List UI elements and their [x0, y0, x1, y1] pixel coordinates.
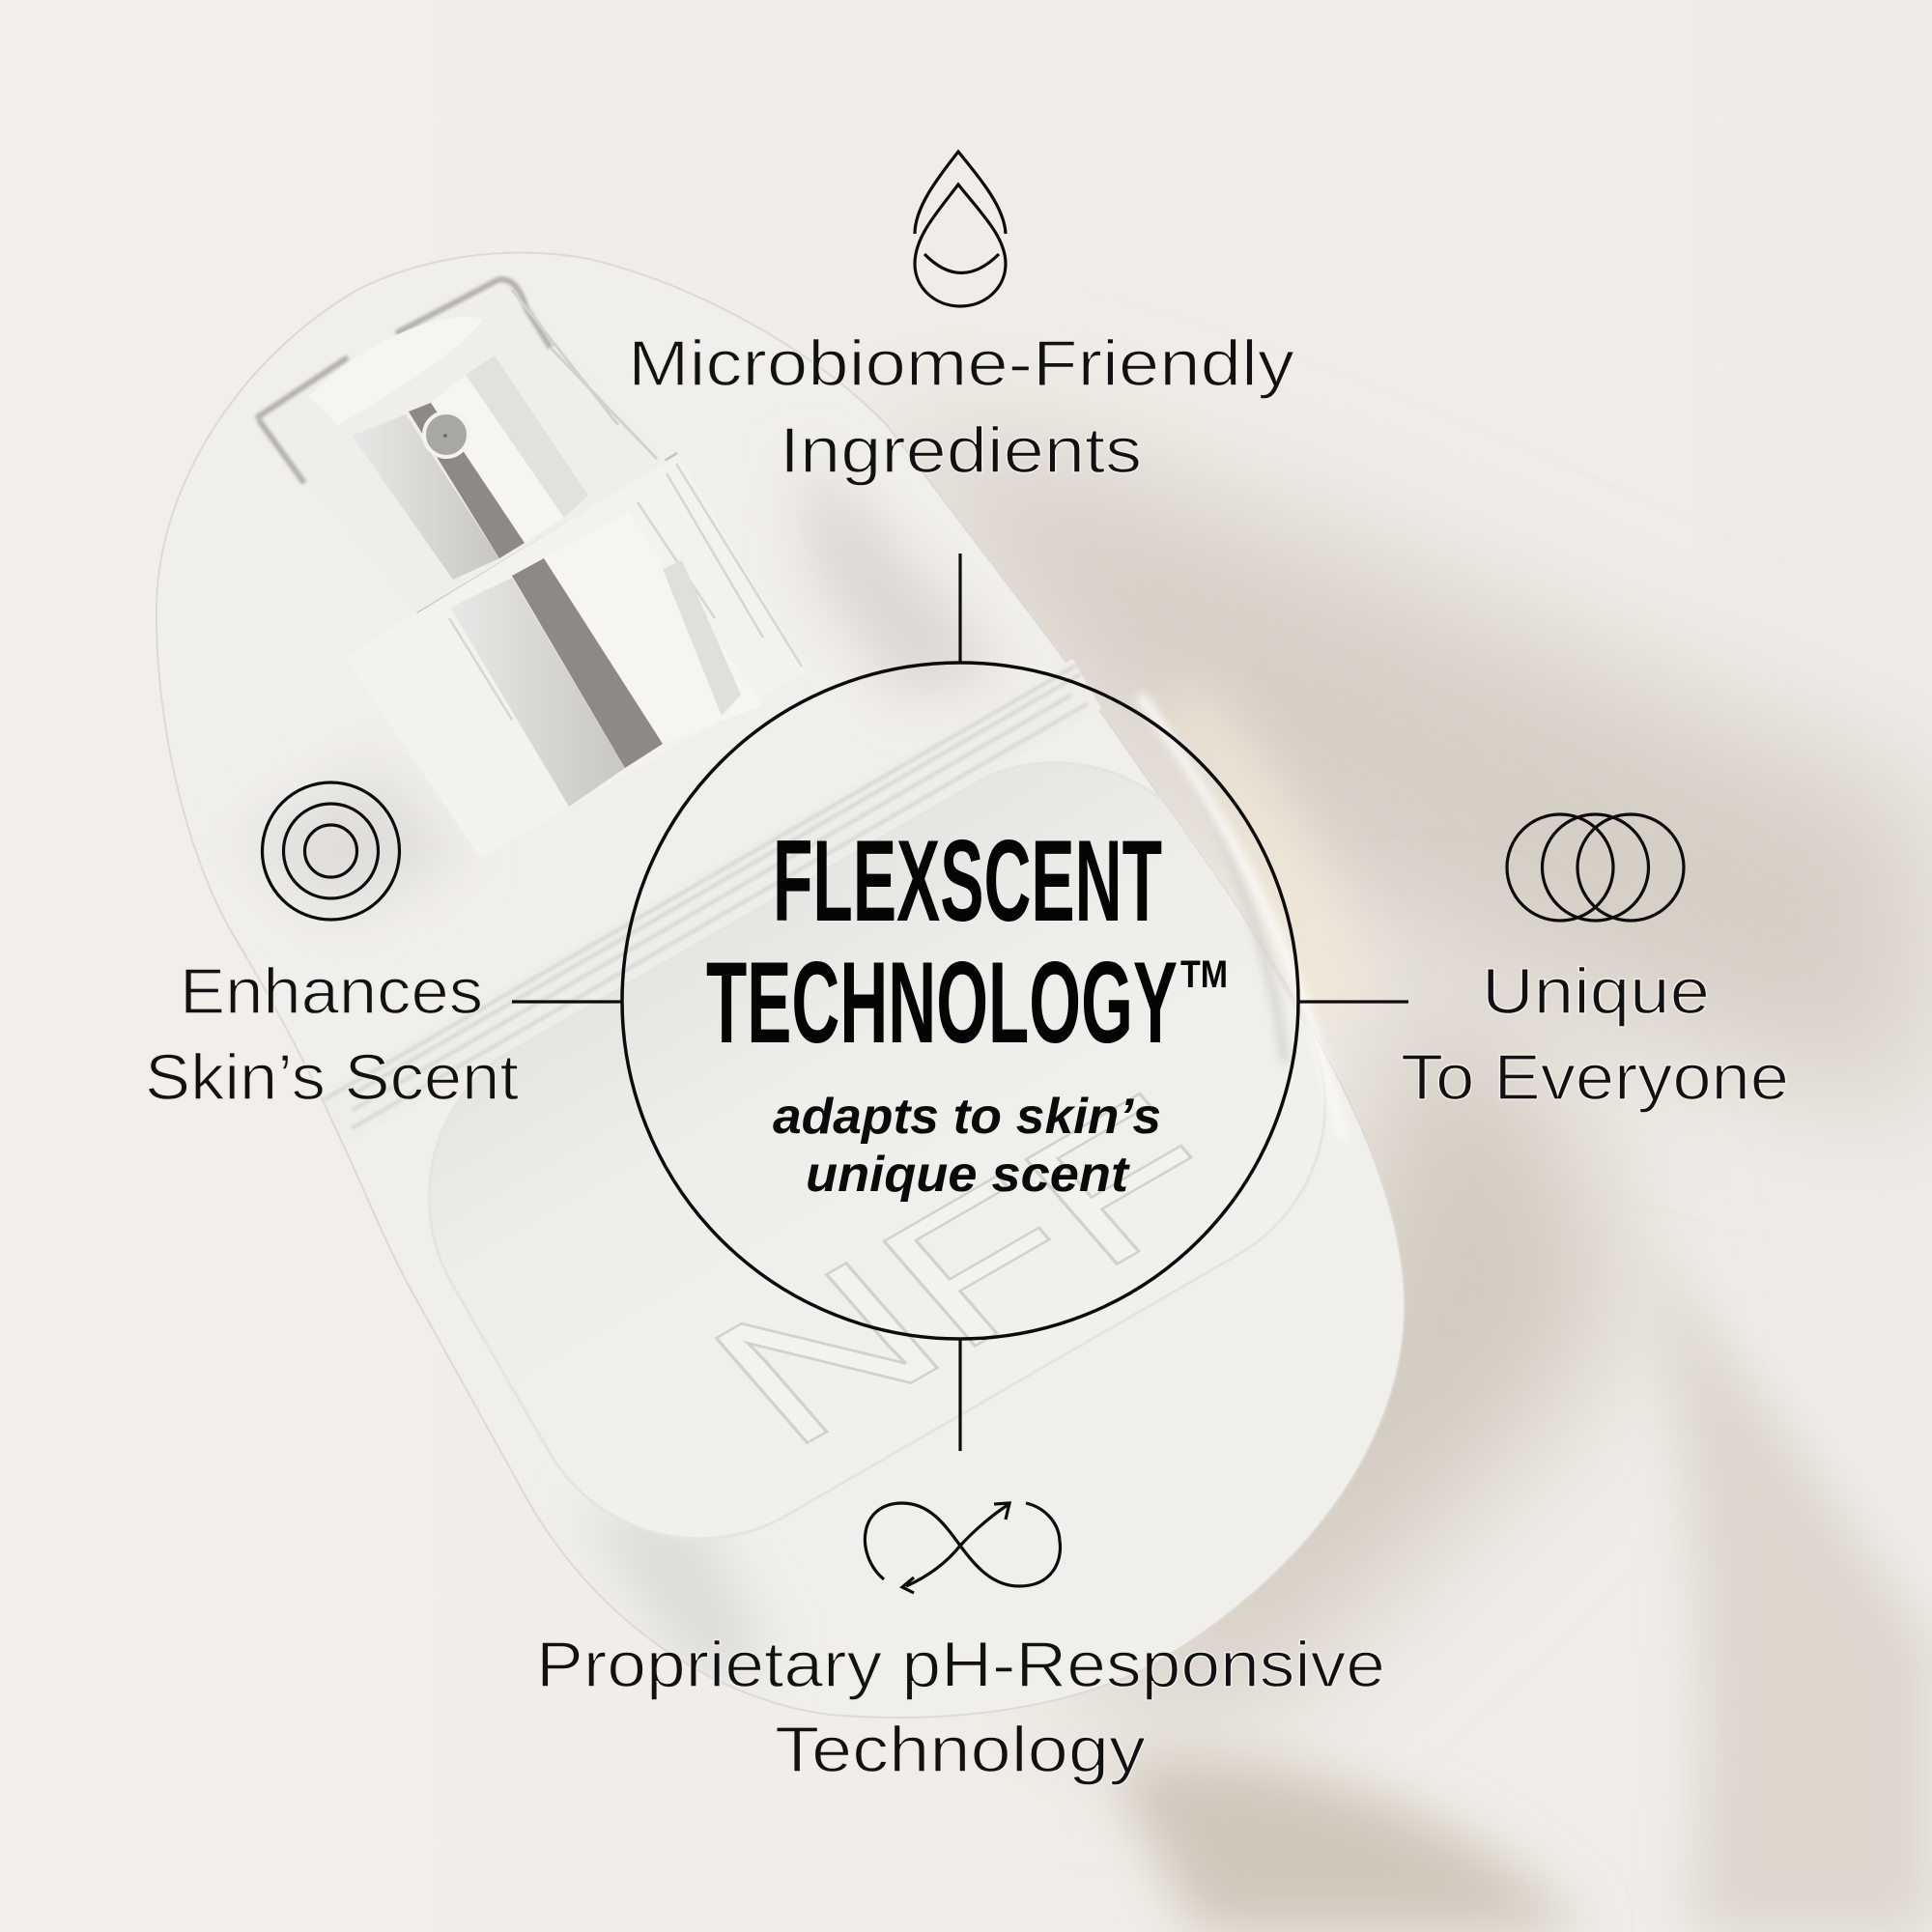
- label: Enhances Skin's Scent: Enhances: [180, 955, 483, 1028]
- icon: concentric circles: [263, 782, 400, 920]
- icon: overlapping circles: [1507, 814, 1684, 921]
- lower liquid body: [427, 761, 1326, 1538]
- label: Unique To Everyone: Unique: [1482, 955, 1710, 1028]
- label: Proprietary pH-Responsive Technology: Technology: [775, 1714, 1147, 1786]
- heading: FlexScent Technology: [706, 816, 1228, 1067]
- label: Microbiome-Friendly Ingredients: Ingredients: [780, 414, 1142, 487]
- glass bottle: [156, 253, 1405, 1718]
- dark pump tube: [409, 403, 525, 558]
- connector line: right: [1298, 1000, 1408, 1004]
- label: Unique To Everyone: To Everyone: [1401, 1041, 1789, 1114]
- connector line: bottom: [958, 1339, 962, 1451]
- shoulder band: [320, 659, 1101, 1144]
- icon: water drop: [915, 152, 1006, 306]
- tagline: unique scent: [806, 1147, 1131, 1203]
- heading: FlexScent Technology: TECHNOLOGY: [706, 938, 1178, 1067]
- connector line: top: [958, 554, 962, 663]
- top cap: [256, 282, 667, 612]
- label: Proprietary pH-Responsive Technology: [536, 1629, 1385, 1786]
- grey panels: [352, 414, 499, 580]
- inner light panel and white strips: [431, 375, 564, 543]
- right glass edge highlights: [1169, 734, 1285, 1063]
- embossed NFF lettering: NFF: [668, 1056, 1268, 1487]
- central circle: [622, 663, 1298, 1339]
- tagline: [773, 1089, 1161, 1203]
- heading: FlexScent Technology: TM: [1180, 953, 1228, 996]
- interior shading: [242, 454, 1389, 1681]
- heading: FlexScent Technology: FLEXSCENT: [773, 816, 1162, 946]
- label: Enhances Skin's Scent: Skin’s Scent: [145, 1041, 519, 1114]
- label: Microbiome-Friendly Ingredients: Microbiome-Friendly: [628, 327, 1295, 400]
- label: Enhances Skin's Scent: [145, 955, 519, 1114]
- label: Proprietary pH-Responsive Technology: Proprietary pH-Responsive: [536, 1629, 1385, 1701]
- tagline: adapts to skin’s: [773, 1089, 1161, 1145]
- connector line: left: [512, 1000, 622, 1004]
- label: Microbiome-Friendly Ingredients: [628, 327, 1295, 487]
- icon: infinity with arrows: [865, 1503, 1061, 1593]
- spray nozzle: [424, 412, 469, 457]
- label: Unique To Everyone: [1401, 955, 1789, 1114]
- bottle outer capsule: [156, 253, 1405, 1718]
- collar base: [345, 453, 806, 858]
- spray pump cap: [256, 279, 806, 858]
